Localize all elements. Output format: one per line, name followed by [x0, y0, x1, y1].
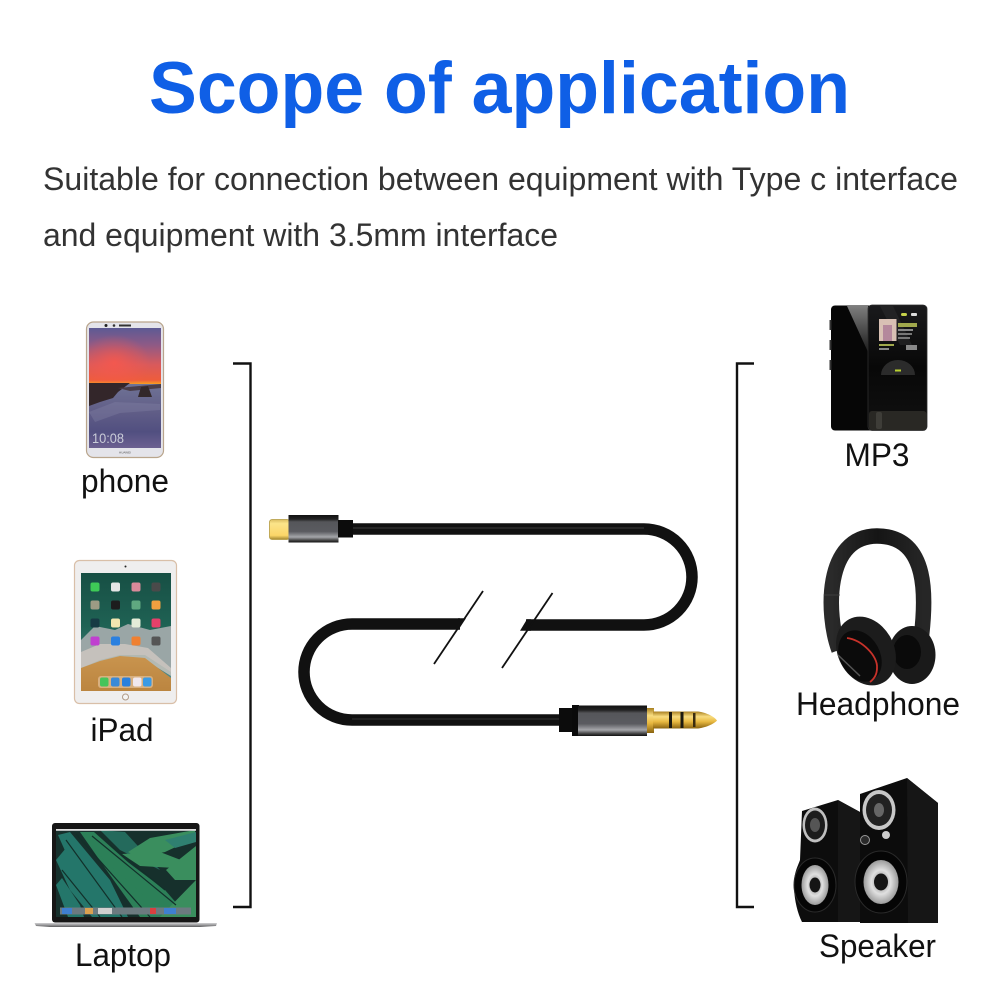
icon: speakers — [794, 778, 938, 923]
connector: USB-C — [270, 515, 353, 542]
icon: headphones — [824, 536, 936, 696]
dock icons — [100, 678, 152, 686]
label: speaker: Speaker — [819, 928, 936, 964]
description text: and equipment with 3.5mm interface — [43, 217, 558, 253]
label: laptop: Laptop — [75, 937, 171, 973]
left bracket — [233, 364, 250, 907]
cable — [304, 528, 692, 720]
description text: Suitable for connection between equipment with Type c interface — [43, 161, 958, 197]
icon: MP3 player — [830, 305, 927, 430]
label: MP3: MP3 — [844, 437, 910, 473]
icon: phone: 10:08 — [92, 431, 124, 446]
right speaker — [855, 778, 938, 923]
app icons — [90, 582, 160, 646]
icon: phone: HUAWEI — [119, 450, 131, 454]
icon: phone — [86, 322, 164, 458]
label: headphone: Headphone — [796, 686, 960, 722]
right bracket — [737, 364, 754, 907]
icon: iPad — [74, 560, 176, 704]
icon: laptop — [34, 823, 217, 927]
description text — [43, 161, 958, 253]
connector: 3.5mm jack — [559, 705, 717, 736]
break mark 1 — [434, 591, 483, 664]
label: iPad: iPad — [90, 712, 154, 748]
left speaker — [794, 800, 860, 922]
title: Scope of application — [149, 48, 850, 129]
label: phone: phone — [81, 463, 169, 499]
break mark 2 — [502, 593, 552, 668]
